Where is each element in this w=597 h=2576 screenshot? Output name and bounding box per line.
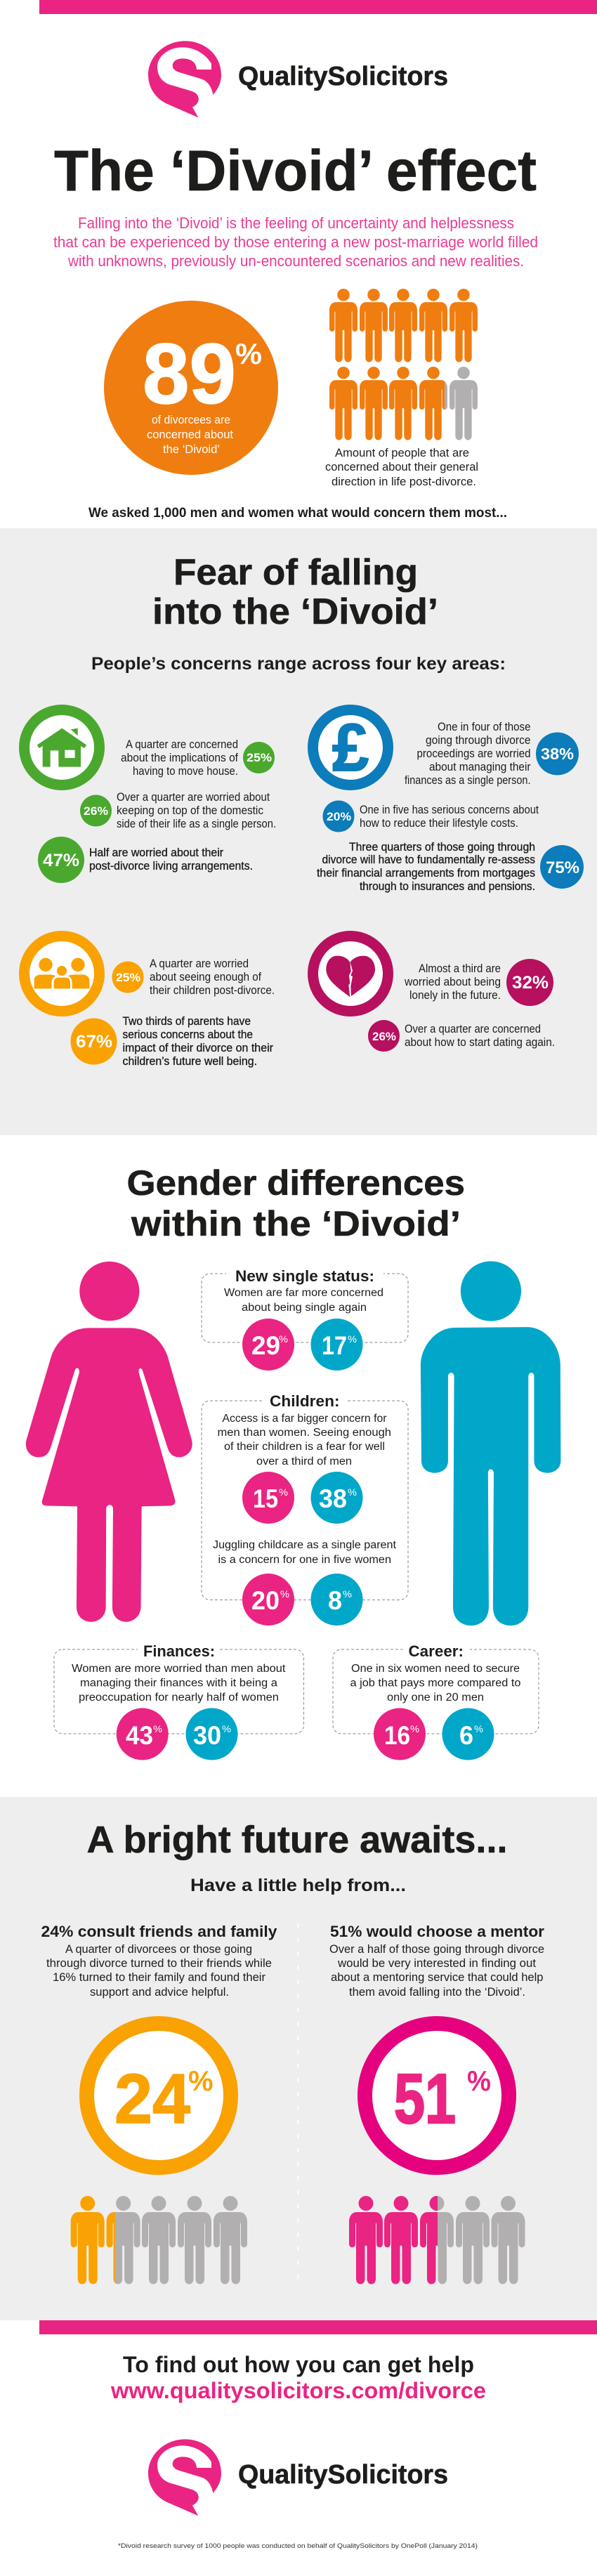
pictogram: 51% people <box>349 2196 525 2284</box>
callout: finances: managing their finances with it being a <box>80 1678 277 1689</box>
text: mentor: about a mentoring service that could help <box>331 1971 544 1984</box>
title: The ‘Divoid’ effect <box>54 139 537 203</box>
stat 20% <box>323 801 539 832</box>
group: children <box>24 936 275 1068</box>
pictogram: 9 of 10 people <box>329 289 478 440</box>
column: friends and family <box>41 1923 277 2284</box>
stat 26% domestic: 26% <box>84 804 108 818</box>
text: friends and family: support and advice helpful. <box>90 1986 229 1999</box>
stat 38%: about managing their <box>429 761 531 773</box>
ring: 24%: % <box>188 2065 214 2097</box>
stat 26% dating: about how to start dating again. <box>405 1036 555 1049</box>
text: friends and family: 16% turned to their family and found their <box>53 1971 266 1984</box>
heading: gender differences: within the ‘Divoid’ <box>131 1204 461 1243</box>
stat 75% <box>317 841 584 893</box>
stat 26% dating: Over a quarter are concerned <box>405 1023 541 1035</box>
heading: gender differences <box>126 1163 465 1243</box>
subheading: People’s concerns range across four key areas: <box>91 654 506 674</box>
callout: career: 6 <box>459 1721 473 1750</box>
text: friends and family: A quarter of divorcees or those going <box>65 1943 252 1956</box>
callout: children: over a third of men <box>256 1456 352 1467</box>
ring: 24%: 24 <box>114 2060 190 2138</box>
call to action: To find out how you can get help <box>123 2352 474 2377</box>
stat 25% house move: 25% <box>247 751 272 764</box>
stat 26% domestic: keeping on top of the domestic <box>117 804 263 817</box>
stat circle: 89%: % <box>235 337 262 370</box>
stat 67%: 67% <box>76 1032 112 1052</box>
heading: fear of falling: Fear of falling <box>173 552 418 593</box>
icon: speech bubble S <box>148 2439 221 2516</box>
panel: bright future <box>0 1797 597 2320</box>
stat 26% domestic: Over a quarter are worried about <box>117 791 270 804</box>
callout: children: % <box>279 1486 288 1498</box>
callout: children: 15 <box>253 1484 278 1513</box>
stat 47% living arrangements: post-divorce living arrangements. <box>89 860 253 872</box>
stat 26% dating: 26% <box>372 1030 396 1043</box>
stat 47% living arrangements: 47% <box>43 851 79 870</box>
group: housing <box>24 710 276 883</box>
icon: pound <box>313 710 388 785</box>
stat 26% domestic <box>80 791 276 830</box>
icon: speech bubble S <box>148 41 221 117</box>
stat 25% children <box>112 957 275 997</box>
text: friends and family: through divorce turned to their friends while <box>46 1957 272 1970</box>
icon: pound: £ <box>332 710 369 785</box>
intro text: Falling into the ‘Divoid’ is the feeling of uncertainty and helplessness <box>78 214 514 232</box>
callout: career: 16 <box>384 1721 410 1750</box>
text: mentor: Over a half of those going through divorce <box>329 1943 544 1956</box>
callout: new single status: 29 <box>251 1331 280 1360</box>
callout: children: % <box>280 1588 289 1600</box>
callout: career: Career: <box>409 1642 464 1660</box>
stat 25% children: A quarter are worried <box>150 957 249 970</box>
callout: children: 20 <box>251 1586 280 1615</box>
stat 67%: impact of their divorce on their <box>122 1042 273 1054</box>
stat 38% <box>405 721 579 787</box>
stat 25% children: about seeing enough of <box>150 971 261 983</box>
ring: 51% <box>365 2023 509 2168</box>
column: mentor <box>329 1923 544 2284</box>
ring: 51%: % <box>467 2065 491 2097</box>
callout: finances: preoccupation for nearly half of women <box>79 1692 279 1704</box>
pictogram: 24% people <box>71 2196 247 2284</box>
stat 75%: their financial arrangements from mortgages <box>317 867 535 880</box>
callout: finances: Finances: <box>143 1642 215 1660</box>
callout: children: Access is a far bigger concern for <box>222 1413 386 1425</box>
stat 75%: 75% <box>546 858 579 877</box>
callout: new single status: % <box>348 1333 357 1345</box>
callout: finances: 43 <box>126 1721 153 1750</box>
pictogram caption: concerned about their general <box>325 460 478 473</box>
group: finances <box>313 710 584 893</box>
callout: career: % <box>474 1723 483 1734</box>
logo: QualitySolicitors footer <box>148 2439 448 2516</box>
stat circle: 89%: the ‘Divoid’ <box>163 443 220 456</box>
stat 47% living arrangements: Half are worried about their <box>89 846 223 859</box>
stat 25% house move: about the implications of <box>121 752 238 764</box>
stat 38%: going through divorce <box>426 734 531 747</box>
stat 25% children: their children post-divorce. <box>150 984 275 997</box>
callout: new single status: Women are far more concerned <box>224 1287 383 1299</box>
callout: career: a job that pays more compared to <box>350 1678 521 1689</box>
subheading: have a little help: Have a little help from... <box>190 1876 406 1895</box>
heading: fear of falling <box>152 552 438 632</box>
stat 47% living arrangements <box>38 837 253 883</box>
icon: woman figure <box>26 1262 192 1622</box>
callout: children: Children: <box>270 1392 340 1410</box>
callout: children: 8 <box>328 1586 342 1615</box>
callout: new single status: 17 <box>322 1331 347 1360</box>
text: mentor: would be very interested in finding out <box>337 1957 536 1970</box>
bottom pink bar <box>39 2320 597 2334</box>
callout: career: % <box>410 1723 419 1734</box>
stat 75%: divorce will have to fundamentally re-assess <box>322 854 535 866</box>
ring: 24% <box>87 2023 230 2168</box>
stat circle: 89%: 89 <box>143 326 236 421</box>
callout: children: is a concern for one in five women <box>218 1554 391 1566</box>
callout: career: only one in 20 men <box>387 1692 484 1704</box>
stat 38%: proceedings are worried <box>417 747 531 760</box>
callout: new single status: about being single again <box>242 1302 367 1314</box>
stat 67%: Two thirds of parents have <box>122 1015 251 1028</box>
stat 25% house move: having to move house. <box>133 765 238 778</box>
pictogram caption: Amount of people that are <box>335 446 469 459</box>
text: mentor: them avoid falling into the ‘Divoid’. <box>349 1986 525 1999</box>
stat 20%: how to reduce their lifestyle costs. <box>360 817 518 830</box>
callout: career <box>333 1642 539 1760</box>
stat 32%: worried about being <box>404 976 501 988</box>
icon: house <box>24 710 100 785</box>
stat 32%: lonely in the future. <box>409 989 501 1002</box>
stat 20%: One in five has serious concerns about <box>360 804 539 816</box>
wordmark: QualitySolicitors <box>238 62 448 91</box>
top pink bar <box>39 0 597 14</box>
callout: career: One in six women need to secure <box>351 1663 520 1675</box>
stat 32%: Almost a third are <box>419 962 501 975</box>
callout: finances: % <box>153 1723 162 1734</box>
stat 25% children: 25% <box>116 971 140 984</box>
stat 26% dating <box>368 1020 555 1052</box>
ring: 51%: 51 <box>394 2060 456 2138</box>
intro text: with unknowns, previously un-encountered scenarios and new realities. <box>67 252 524 270</box>
group: loneliness <box>313 936 555 1052</box>
text: mentor: 51% would choose a mentor <box>330 1923 544 1940</box>
pictogram caption: direction in life post-divorce. <box>332 475 476 488</box>
callout: children: 38 <box>319 1484 347 1513</box>
callout: children: % <box>348 1486 357 1498</box>
pictogram caption <box>325 446 478 488</box>
stat 25% house move: A quarter are concerned <box>126 738 238 751</box>
icon: broken heart <box>313 936 388 1012</box>
heading: gender differences: Gender differences <box>126 1163 465 1203</box>
stat 67% <box>70 1015 273 1068</box>
survey intro line: We asked 1,000 men and women what would concern them most... <box>88 505 507 521</box>
icon: family <box>24 936 100 1012</box>
wordmark: QualitySolicitors <box>238 2460 448 2490</box>
stat circle: 89% <box>104 301 278 475</box>
text: mentor <box>329 1923 544 1999</box>
callout: finances <box>54 1642 303 1760</box>
callout: children: men than women. Seeing enough <box>218 1427 391 1439</box>
stat 67%: serious concerns about the <box>122 1028 253 1041</box>
text: friends and family: 24% consult friends and family <box>41 1923 277 1940</box>
stat 25% house move <box>121 738 275 778</box>
callout: finances: 30 <box>193 1721 221 1750</box>
footnote: *Divoid research survey of 1000 people was conducted on behalf of QualitySolicitors by OnePoll (January 2014) <box>118 2542 478 2550</box>
stat 67%: children’s future well being. <box>122 1055 257 1068</box>
stat 75%: through to insurances and pensions. <box>360 880 535 893</box>
callout: new single status: New single status: <box>235 1267 374 1285</box>
heading: bright future: A bright future awaits... <box>87 1819 507 1861</box>
stat 38%: One in four of those <box>438 721 531 733</box>
callout: children: of their children is a fear for well <box>224 1441 385 1453</box>
stat 32%: 32% <box>512 973 549 993</box>
callout: new single status: % <box>279 1333 288 1345</box>
icon: man figure <box>421 1261 560 1626</box>
logo: QualitySolicitors header <box>148 41 448 117</box>
stat 32% <box>404 959 553 1006</box>
callout: children: % <box>343 1588 352 1600</box>
callout: new single status <box>202 1267 408 1371</box>
stat 20%: 20% <box>327 810 351 823</box>
callout: finances: % <box>222 1723 231 1734</box>
stat circle: 89%: concerned about <box>147 428 233 441</box>
callout: children: Juggling childcare as a single parent <box>213 1539 397 1551</box>
stat 26% domestic: side of their life as a single person. <box>117 818 276 830</box>
heading: fear of falling: into the ‘Divoid’ <box>152 591 438 632</box>
callout: finances: Women are more worried than men about <box>72 1663 286 1675</box>
text: friends and family <box>41 1923 277 1999</box>
call to action <box>110 2352 486 2403</box>
stat circle: 89%: of divorcees are <box>152 413 230 426</box>
panel: fear of falling <box>0 528 597 1135</box>
callout: children <box>202 1392 408 1626</box>
intro text <box>53 214 538 270</box>
stat 38%: finances as a single person. <box>405 774 531 787</box>
stat 38%: 38% <box>541 745 574 763</box>
call to action: www.qualitysolicitors.com/divorce <box>110 2378 486 2403</box>
stat 75%: Three quarters of those going through <box>349 841 535 854</box>
intro text: that can be experienced by those entering a new post-marriage world filled <box>53 233 538 251</box>
